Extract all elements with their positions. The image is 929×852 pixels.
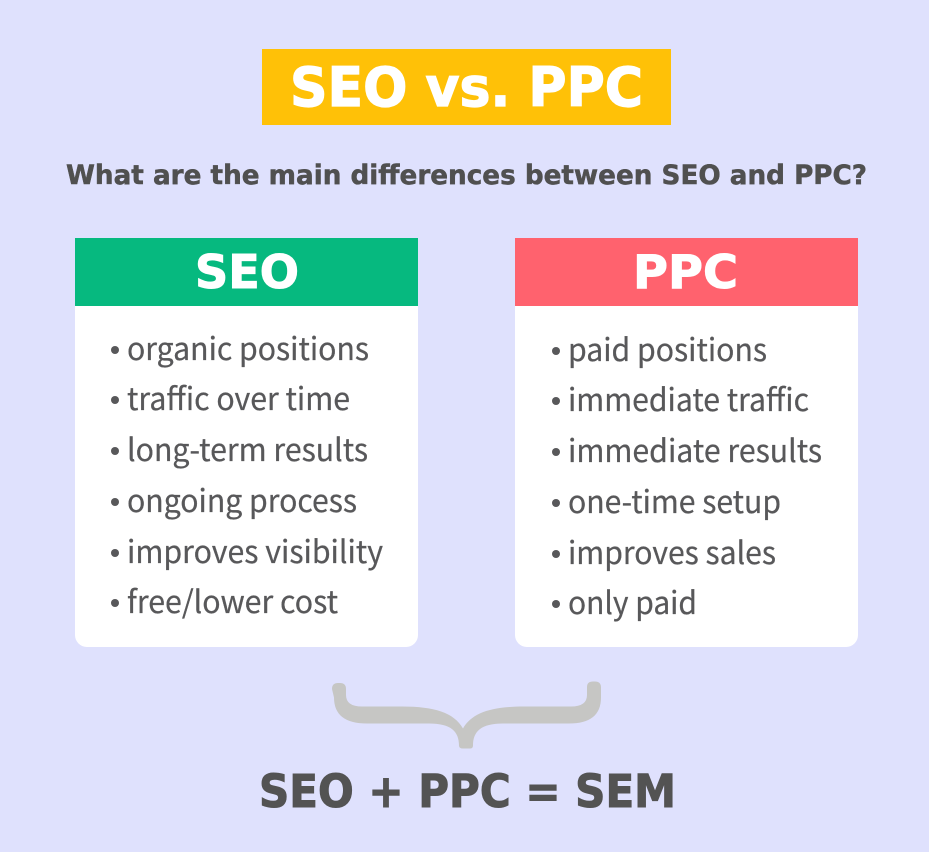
subtitle question: What are the main differences between SEO and PPC? xyxy=(66,160,867,191)
formula: SEO + PPC = SEM xyxy=(259,765,676,818)
SEO list: organic positions xyxy=(127,324,369,369)
PPC list: immediate traffic xyxy=(568,375,809,420)
PPC list: paid positions xyxy=(568,325,767,370)
PPC list: one-time setup xyxy=(568,477,781,522)
panel: PPC xyxy=(515,238,858,647)
PPC list: only paid xyxy=(568,578,697,623)
SEO list: improves visibility xyxy=(127,527,383,572)
SEO list: long-term results xyxy=(127,425,368,470)
SEO list xyxy=(111,324,383,622)
PPC header: PPC xyxy=(633,245,738,299)
PPC list: immediate results xyxy=(568,426,822,471)
PPC list: improves sales xyxy=(568,528,776,573)
SEO header: SEO xyxy=(195,245,299,299)
panel: SEO xyxy=(75,238,418,647)
SEO list: free/lower cost xyxy=(127,577,338,622)
icon: curly brace xyxy=(332,682,601,748)
SEO list: ongoing process xyxy=(127,476,357,521)
SEO header xyxy=(75,238,418,306)
PPC list xyxy=(552,325,822,623)
PPC header xyxy=(515,238,858,306)
SEO list: traffic over time xyxy=(127,374,350,419)
title: SEO vs. PPC xyxy=(290,56,643,119)
